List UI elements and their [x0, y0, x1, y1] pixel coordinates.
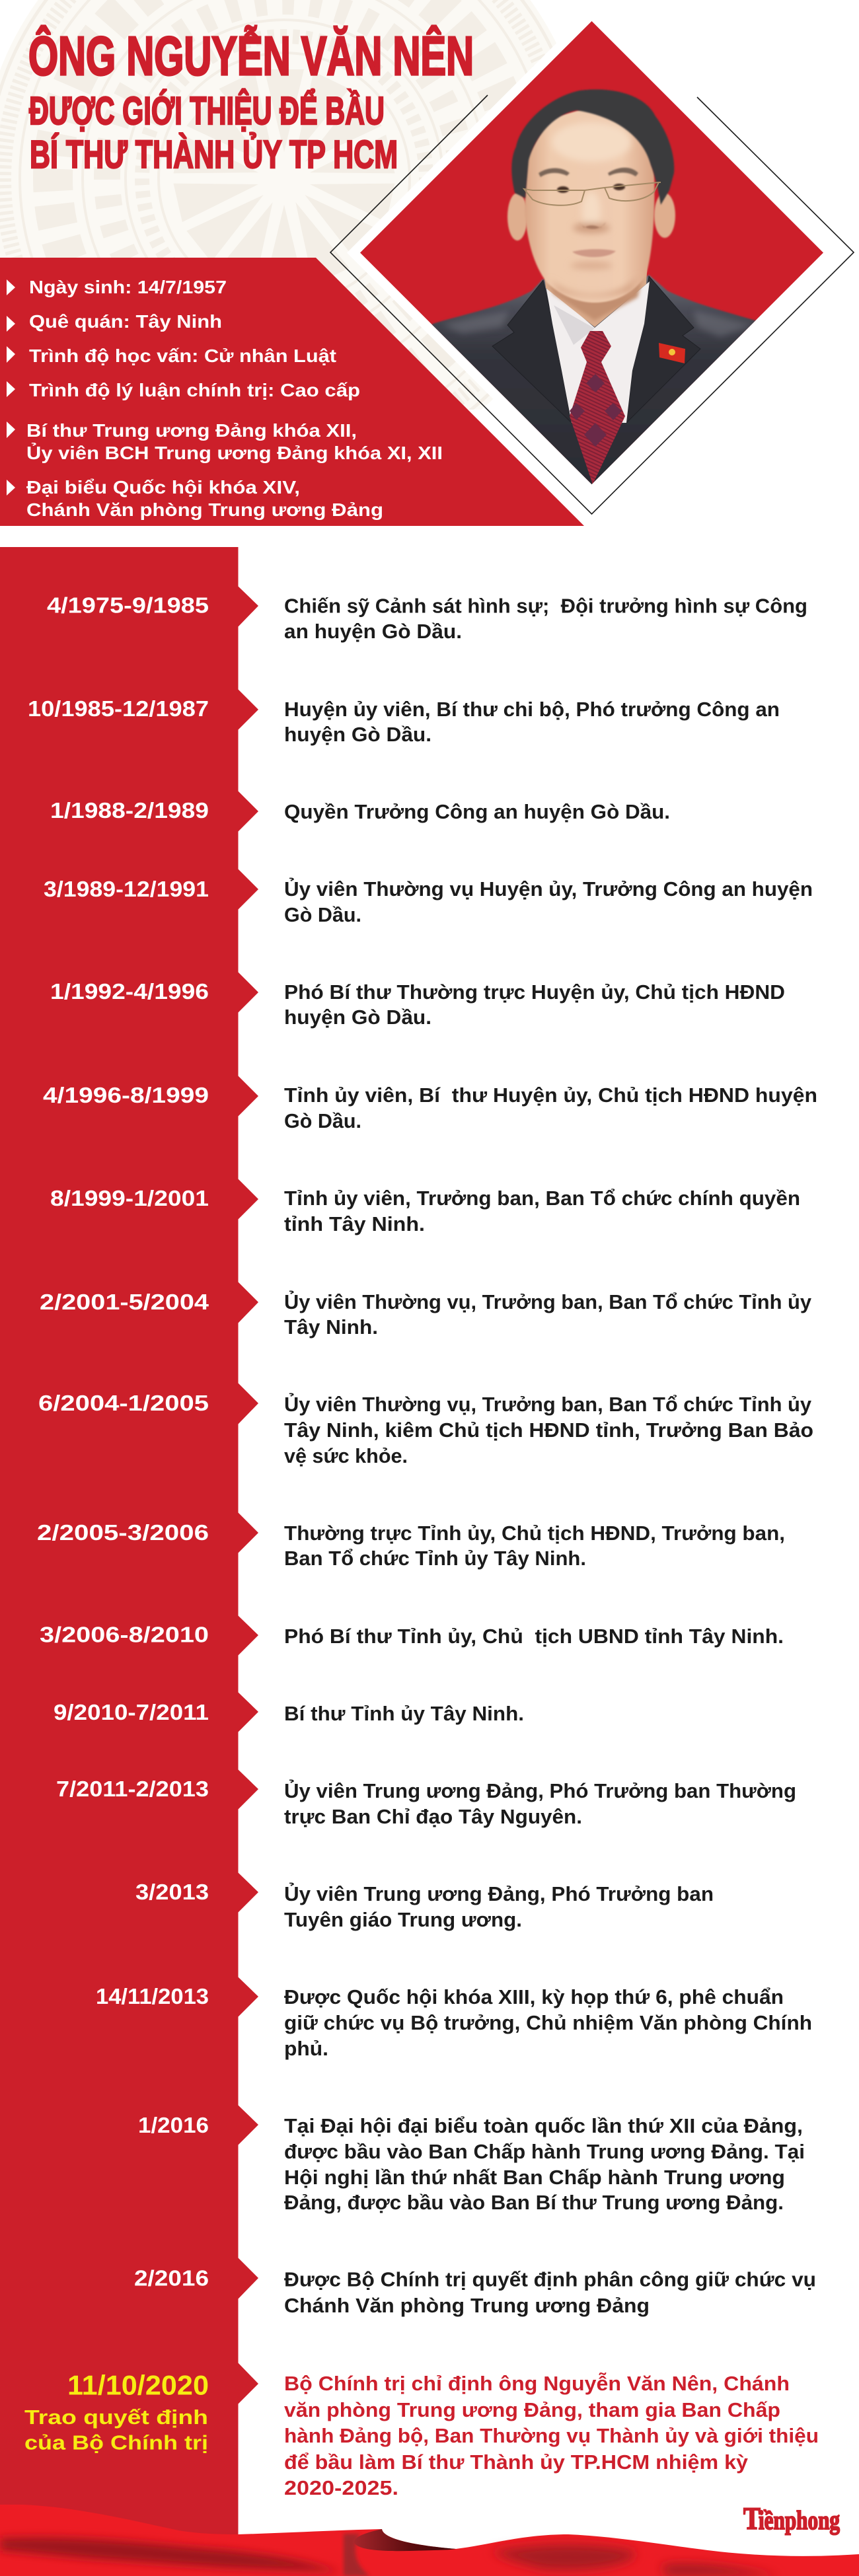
timeline row 14/11/2013: Được Quốc hội khóa XIII, kỳ họp thứ 6, phê chuẩn [284, 1985, 784, 2008]
timeline row 6/2004-1/2005: Tây Ninh, kiêm Chủ tịch HĐND tỉnh, Trưởng Ban Bảo [284, 1418, 813, 1442]
timeline row 8/1999-1/2001 [50, 1179, 800, 1235]
timeline row 8/1999-1/2001: tỉnh Tây Ninh. [284, 1212, 425, 1235]
timeline row 7/2011-2/2013: trực Ban Chỉ đạo Tây Nguyên. [284, 1805, 582, 1828]
timeline row 4/1975-9/1985: 4/1975-9/1985 [47, 593, 209, 617]
timeline row 11/10/2020 highlighted: 11/10/2020 [67, 2369, 209, 2401]
timeline row 11/10/2020 highlighted: văn phòng Trung ương Đảng, tham gia Ban Chấp [284, 2398, 780, 2421]
info item: deputy [7, 477, 383, 520]
timeline row 11/10/2020 highlighted: Bộ Chính trị chỉ định ông Nguyễn Văn Nên, Chánh [284, 2372, 790, 2395]
footer: waving red flag [0, 2505, 859, 2576]
timeline row 8/1999-1/2001: Tỉnh ủy viên, Trưởng ban, Ban Tổ chức chính quyền [284, 1187, 800, 1210]
timeline row 3/1989-12/1991: Gò Dầu. [284, 903, 361, 926]
timeline row 1/2016: Hội nghị lần thứ nhất Ban Chấp hành Trung ương [284, 2166, 785, 2189]
timeline row 2/2001-5/2004: Ủy viên Thường vụ, Trưởng ban, Ban Tổ chức Tỉnh ủy [284, 1290, 812, 1313]
timeline row 3/2013 [135, 1872, 714, 1931]
hair [511, 89, 674, 205]
info item: secretary [7, 420, 443, 463]
timeline row 7/2011-2/2013: 7/2011-2/2013 [56, 1777, 209, 1801]
timeline row 2/2001-5/2004: Tây Ninh. [284, 1315, 378, 1339]
timeline row 4/1975-9/1985: Chiến sỹ Cảnh sát hình sự; Đội trưởng hình sự Công [284, 595, 807, 617]
red diamond behind portrait [360, 21, 823, 484]
timeline row 2/2016: Được Bộ Chính trị quyết định phân công giữ chức vụ [284, 2267, 816, 2291]
shoulder highlights [443, 311, 753, 337]
background: bronze drum pattern [0, 0, 556, 410]
timeline row 2/2016: 2/2016 [134, 2266, 209, 2290]
right lapel [626, 276, 700, 423]
thin outline diamond [330, 95, 854, 514]
timeline row 1/2016: được bầu vào Ban Chấp hành Trung ương Đảng. Tại [284, 2140, 805, 2163]
info item: hometown: Quê quán: Tây Ninh [29, 311, 222, 332]
timeline red column [0, 547, 238, 2542]
timeline row 14/11/2013: 14/11/2013 [96, 1984, 209, 2008]
timeline row 14/11/2013 [96, 1977, 812, 2060]
info item: deputy: Đại biểu Quốc hội khóa XIV, [26, 477, 300, 497]
ears [507, 193, 675, 240]
timeline row 3/2006-8/2010: 3/2006-8/2010 [40, 1623, 209, 1646]
mouth [572, 249, 616, 257]
timeline row 2/2001-5/2004 [40, 1282, 812, 1339]
timeline row 10/1985-12/1987 [28, 689, 780, 746]
shirt [546, 281, 650, 423]
timeline row 10/1985-12/1987: huyện Gò Dầu. [284, 723, 431, 746]
timeline row 1/1988-2/1989 [50, 791, 670, 832]
info item: political theory: Trình độ lý luận chính trị: Cao cấp [29, 380, 360, 400]
timeline row 1/1988-2/1989: 1/1988-2/1989 [50, 798, 209, 823]
suit [431, 274, 756, 484]
info item: secretary: Bí thư Trung ương Đảng khóa XII, [26, 420, 357, 441]
timeline row 3/2013: 3/2013 [135, 1880, 209, 1904]
timeline row 3/2006-8/2010: Phó Bí thư Tỉnh ủy, Chủ tịch UBND tỉnh Tây Ninh. [284, 1625, 784, 1648]
timeline row 11/10/2020 highlighted: để bầu làm Bí thư Thành ủy TP.HCM nhiệm kỳ [284, 2450, 749, 2474]
flag curl [354, 2529, 456, 2551]
info item: deputy: Chánh Văn phòng Trung ương Đảng [26, 499, 383, 520]
timeline row 3/1989-12/1991: Ủy viên Thường vụ Huyện ủy, Trưởng Công an huyện [284, 877, 813, 901]
timeline row 1/2016: Đảng, được bầu vào Ban Bí thư Trung ương Đảng. [284, 2191, 784, 2214]
face [525, 106, 654, 303]
timeline row 4/1975-9/1985: an huyện Gò Dầu. [284, 620, 462, 643]
info item: birth date: Ngày sinh: 14/7/1957 [29, 277, 227, 297]
timeline row 4/1996-8/1999: 4/1996-8/1999 [43, 1083, 209, 1107]
timeline row 6/2004-1/2005: vệ sức khỏe. [284, 1444, 408, 1467]
lapel pin flag [659, 343, 685, 363]
timeline row 2/2005-3/2006: Ban Tổ chức Tỉnh ủy Tây Ninh. [284, 1547, 586, 1570]
timeline row 3/2006-8/2010 [40, 1615, 784, 1656]
tie [570, 331, 625, 484]
title: ĐƯỢC GIỚI THIỆU ĐỂ BẦU [29, 89, 385, 133]
flag shadow right [661, 2564, 780, 2576]
flag shadow under curl [344, 2534, 370, 2576]
timeline row 4/1996-8/1999: Gò Dầu. [284, 1109, 361, 1132]
timeline row 7/2011-2/2013: Ủy viên Trung ương Đảng, Phó Trưởng ban Thường [284, 1779, 796, 1802]
white band around the diamond [347, 8, 837, 497]
timeline row 1/1988-2/1989: Quyền Trưởng Công an huyện Gò Dầu. [284, 800, 670, 823]
glasses [524, 182, 661, 205]
neck shadow [550, 283, 642, 321]
timeline row 11/10/2020 highlighted: của Bộ Chính trị [24, 2431, 208, 2454]
timeline row 1/1992-4/1996: 1/1992-4/1996 [50, 979, 209, 1004]
flag shadow centre [492, 2545, 635, 2570]
panel: personal info [0, 258, 584, 526]
timeline row 1/2016: 1/2016 [138, 2113, 209, 2137]
timeline row 9/2010-7/2011: 9/2010-7/2011 [54, 1700, 209, 1724]
timeline row 3/1989-12/1991: 3/1989-12/1991 [44, 877, 209, 901]
title [28, 25, 474, 176]
timeline row 6/2004-1/2005 [38, 1383, 813, 1467]
timeline row 4/1975-9/1985 [47, 586, 807, 643]
title: ÔNG NGUYỄN VĂN NÊN [28, 25, 474, 87]
timeline row 10/1985-12/1987: 10/1985-12/1987 [28, 696, 209, 721]
info item: education: Trình độ học vấn: Cử nhân Luật [29, 346, 336, 366]
timeline row 2/2001-5/2004: 2/2001-5/2004 [40, 1290, 209, 1314]
timeline row 9/2010-7/2011 [54, 1692, 524, 1732]
timeline row 6/2004-1/2005: Ủy viên Thường vụ, Trưởng ban, Ban Tổ chức Tỉnh ủy [284, 1392, 812, 1416]
timeline row 3/1989-12/1991 [44, 869, 813, 926]
timeline row 2/2005-3/2006: Thường trực Tỉnh ủy, Chủ tịch HĐND, Trưởng ban, [284, 1522, 785, 1545]
timeline row 6/2004-1/2005: 6/2004-1/2005 [38, 1391, 209, 1415]
timeline row 11/10/2020 highlighted: 2020-2025. [284, 2476, 398, 2499]
logo: Tiền Phong [743, 2501, 840, 2536]
timeline row 2/2005-3/2006: 2/2005-3/2006 [37, 1520, 209, 1545]
timeline row 7/2011-2/2013 [56, 1769, 796, 1828]
timeline row 14/11/2013: phủ. [284, 2037, 328, 2060]
timeline row 1/1992-4/1996: Phó Bí thư Thường trực Huyện ủy, Chủ tịch HĐND [284, 980, 785, 1004]
timeline row 1/2016: Tại Đại hội đại biểu toàn quốc lần thứ XII của Đảng, [284, 2114, 803, 2137]
timeline row 11/10/2020 highlighted: hành Đảng bộ, Ban Thường vụ Thành ủy và giới thiệu [284, 2424, 819, 2447]
nose [583, 223, 605, 230]
eyes [557, 184, 625, 193]
title: BÍ THƯ THÀNH ỦY TP HCM [30, 132, 398, 176]
logo: Tiền Phong: T [743, 2501, 761, 2536]
neck [543, 261, 648, 327]
timeline row 11/10/2020 highlighted [24, 2363, 819, 2499]
timeline row 1/1992-4/1996: huyện Gò Dầu. [284, 1006, 431, 1029]
timeline row 1/2016 [138, 2105, 805, 2214]
timeline row 3/2013: Tuyên giáo Trung ương. [284, 1908, 522, 1931]
flag shadow left [0, 2538, 340, 2572]
timeline row 1/1992-4/1996 [50, 972, 785, 1029]
timeline row 2/2005-3/2006 [37, 1512, 785, 1570]
timeline row 4/1996-8/1999: Tỉnh ủy viên, Bí thư Huyện ủy, Chủ tịch HĐND huyện [284, 1084, 817, 1107]
timeline row 8/1999-1/2001: 8/1999-1/2001 [50, 1186, 209, 1210]
info item: secretary: Ủy viên BCH Trung ương Đảng khóa XI, XII [26, 442, 443, 463]
timeline row 10/1985-12/1987: Huyện ủy viên, Bí thư chi bộ, Phó trưởng Công an [284, 698, 780, 721]
collar shading [554, 305, 595, 345]
timeline row 3/2013: Ủy viên Trung ương Đảng, Phó Trưởng ban [284, 1882, 714, 1905]
timeline row 4/1996-8/1999 [43, 1076, 817, 1132]
timeline row 11/10/2020 highlighted: Trao quyết định [24, 2406, 208, 2429]
left lapel [492, 280, 572, 423]
timeline row 2/2016 [134, 2258, 816, 2317]
eyebrows [539, 168, 638, 177]
timeline row 9/2010-7/2011: Bí thư Tỉnh ủy Tây Ninh. [284, 1702, 524, 1725]
timeline row 2/2016: Chánh Văn phòng Trung ương Đảng [284, 2294, 650, 2317]
face shading [548, 122, 640, 297]
portrait of Nguyễn Văn Nên [423, 89, 766, 502]
timeline row 14/11/2013: giữ chức vụ Bộ trưởng, Chủ nhiệm Văn phòng Chính [284, 2011, 812, 2034]
